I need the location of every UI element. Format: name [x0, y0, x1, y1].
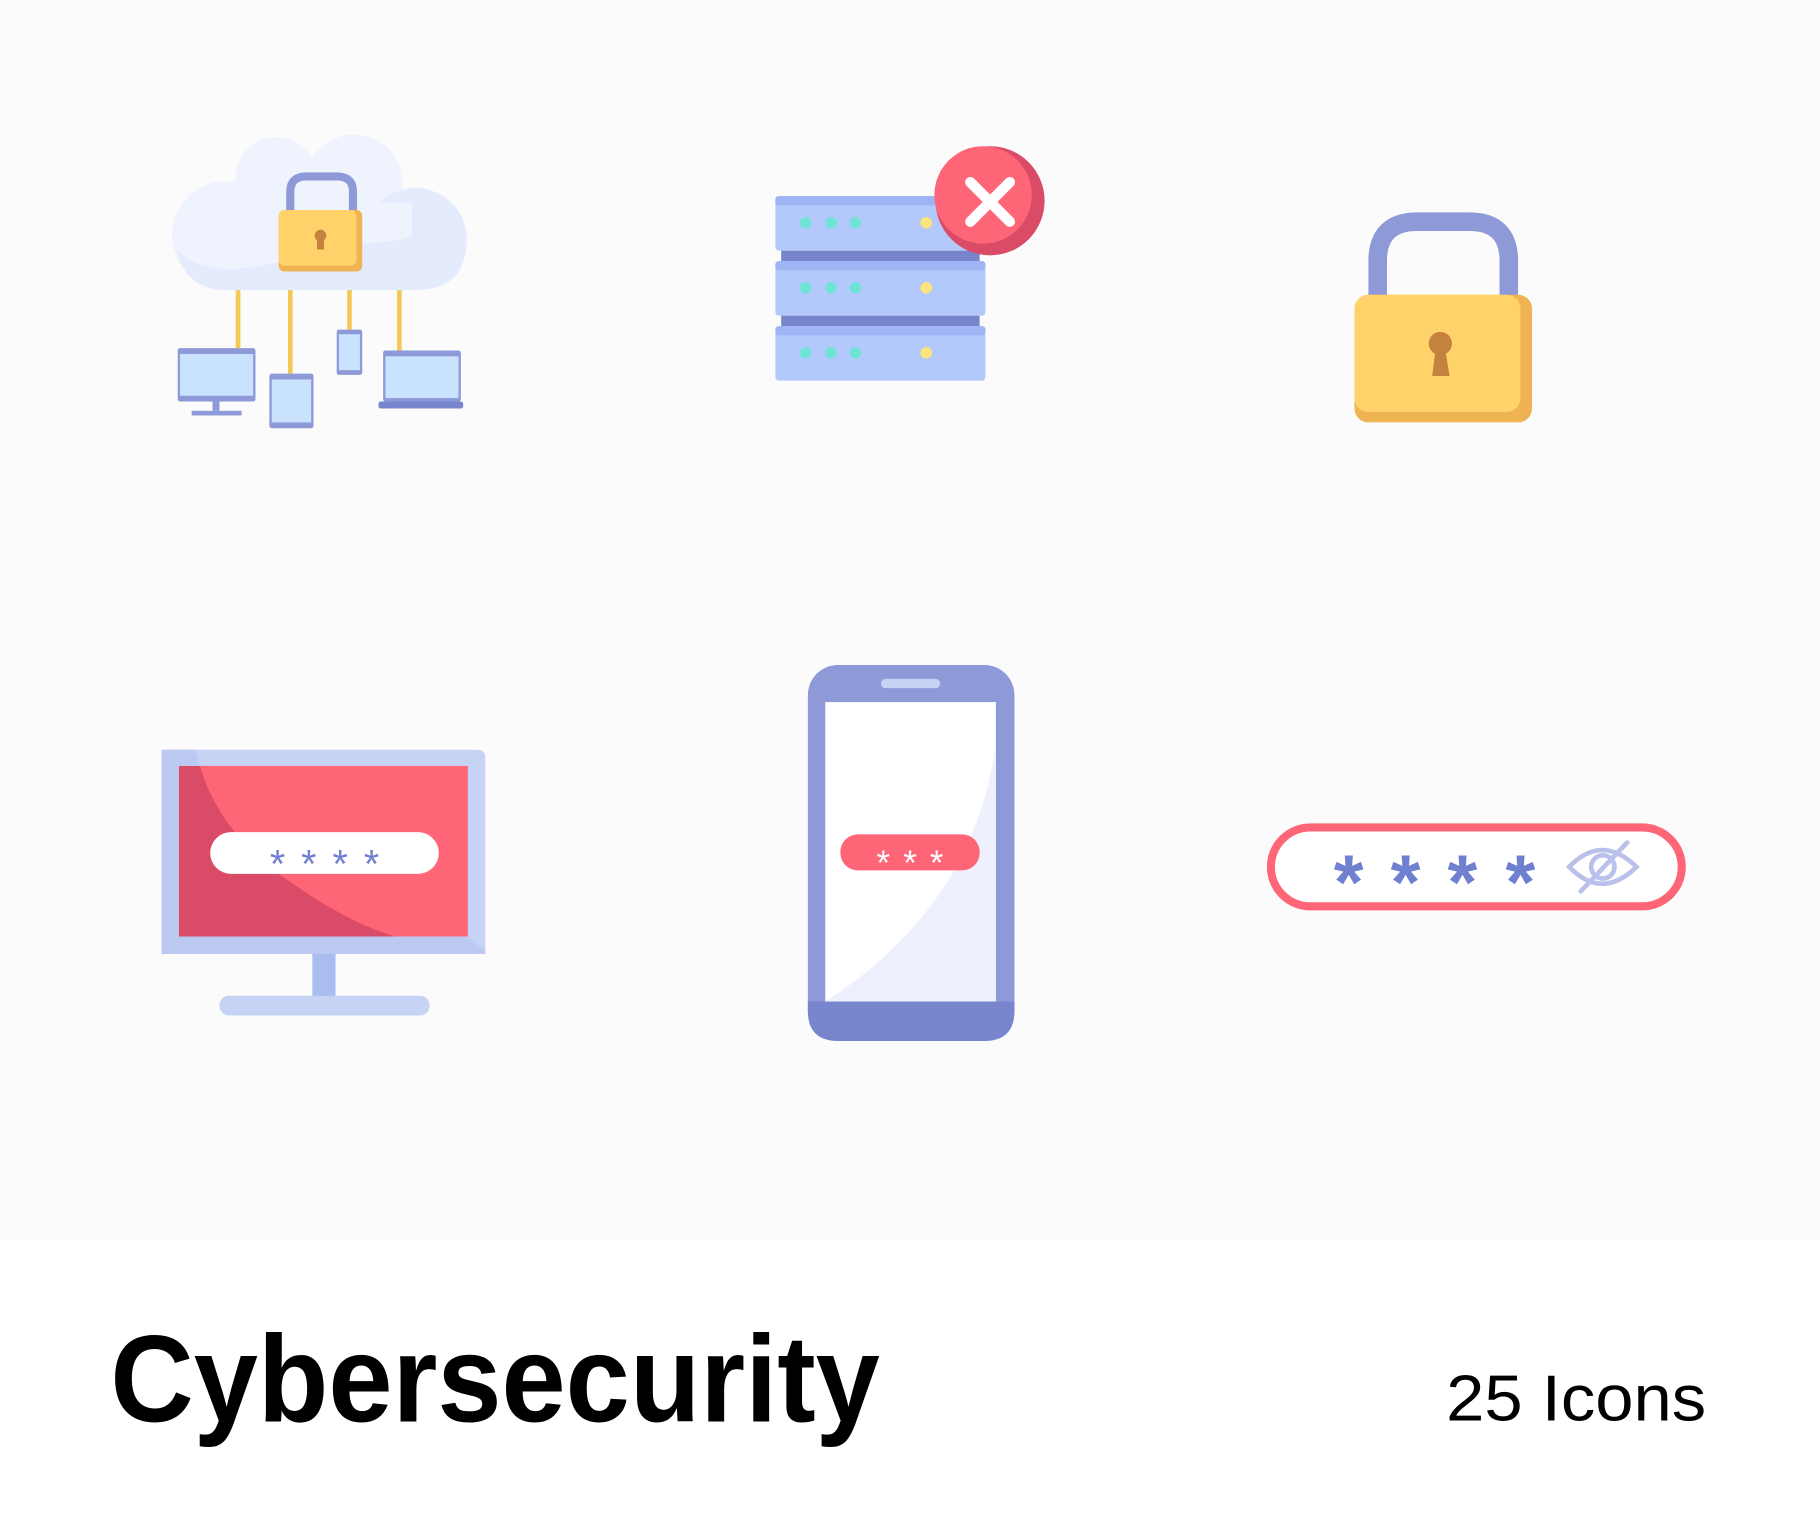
monitor — [178, 348, 255, 402]
icon: monitor password — [161, 750, 485, 1015]
icon: smartphone password: * — [903, 844, 917, 883]
icon: hidden password field — [1271, 827, 1682, 926]
icon: monitor password: * — [270, 842, 285, 886]
icon: cloud network lock — [172, 135, 467, 428]
icon: eye crossed — [1569, 843, 1636, 891]
icon: server error — [775, 146, 1045, 381]
icon: smartphone password — [808, 665, 1014, 1041]
icon: monitor password: * — [333, 842, 348, 886]
icon: smartphone password: * — [877, 844, 890, 883]
icon: monitor password: * — [301, 842, 317, 886]
error badge — [936, 146, 1045, 255]
icon: hidden password field: * — [1334, 841, 1364, 926]
icon: hidden password field: * — [1391, 841, 1421, 926]
connectors — [238, 290, 399, 374]
icon: monitor password: * — [364, 842, 379, 886]
phone — [337, 330, 362, 375]
laptop — [383, 350, 461, 402]
lock — [290, 176, 353, 211]
icon: smartphone password: * — [930, 844, 943, 883]
icon: hidden password field: * — [1506, 841, 1536, 926]
title: Cybersecurity — [110, 1312, 880, 1449]
subtitle: icon count: 25 Icons — [1446, 1361, 1706, 1434]
icon: hidden password field: * — [1447, 841, 1477, 926]
tablet — [269, 374, 313, 428]
icon: padlock — [1354, 222, 1532, 422]
